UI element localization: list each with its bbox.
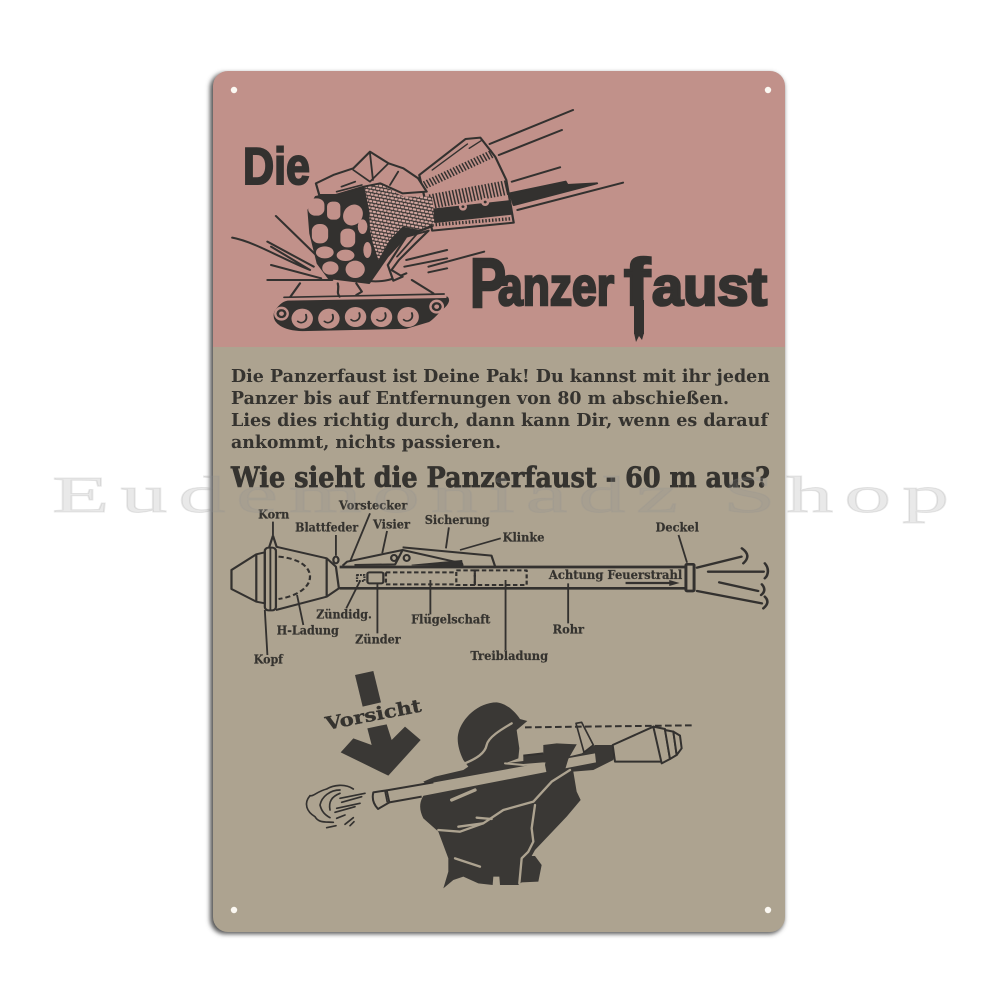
part labels: Kopf <box>254 652 284 666</box>
part labels: Visier <box>372 517 410 531</box>
caution arrow <box>341 671 421 776</box>
fist <box>308 152 434 283</box>
sign panels <box>213 71 785 932</box>
title: Panzerfaust: P <box>470 244 506 322</box>
part labels: Rohr <box>553 622 585 636</box>
part labels: Vorstecker <box>338 498 408 513</box>
part labels: Flügelschaft <box>411 612 491 626</box>
sleeve cone <box>419 138 514 231</box>
part labels: Treibladung <box>470 649 548 663</box>
launch tube on shoulder <box>373 744 596 809</box>
tank <box>274 280 449 331</box>
diagram: Panzerfaust cross-section <box>231 498 768 666</box>
title: Panzerfaust: anzer <box>498 257 614 317</box>
intro text block: Die Panzerfaust ist Deine Pak! Du kannst mit ihr jeden <box>231 366 770 387</box>
intro text block: Panzer bis auf Entfernungen von 80 m abschießen. <box>231 388 729 409</box>
warhead <box>613 727 682 763</box>
title: Die: Die <box>243 138 310 196</box>
mounting holes <box>231 87 771 913</box>
part labels: Achtung Feuerstrahl <box>548 568 683 582</box>
back blast <box>306 785 365 828</box>
title: Panzerfaust: f <box>624 245 651 319</box>
part labels: H-Ladung <box>277 623 339 637</box>
explosion lines <box>232 216 484 281</box>
warhead <box>231 536 339 610</box>
intro text block: ankommt, nichts passieren. <box>231 432 501 453</box>
title: Panzerfaust <box>470 244 767 342</box>
watermark: Eudemoniadz Shop <box>52 467 960 524</box>
intro text block: Lies dies richtig durch, dann kann Dir, wenn es darauf <box>231 410 769 431</box>
part labels: Deckel <box>656 520 699 535</box>
exhaust flames <box>697 548 768 608</box>
line of sight <box>525 725 693 727</box>
fire direction arrow <box>626 580 680 586</box>
caution label: Vorsicht <box>322 696 424 735</box>
sign shadow <box>210 73 784 934</box>
part labels: Zündidg. <box>316 607 372 621</box>
part labels: Korn <box>258 507 289 521</box>
intro text block <box>231 366 770 453</box>
part labels <box>254 498 699 666</box>
part labels: Sicherung <box>425 513 490 527</box>
soldier silhouette <box>420 702 615 888</box>
internal charge and fuze <box>357 570 527 585</box>
illustration: fist striking tank <box>232 110 623 331</box>
part labels: Zünder <box>355 632 401 646</box>
sight and trigger <box>333 547 495 567</box>
illustration: soldier firing and caution arrow <box>306 671 693 888</box>
panel: khaki body <box>213 347 785 932</box>
part labels: Blattfeder <box>295 520 359 535</box>
rear sight <box>576 722 593 752</box>
metal sign infographic <box>54 70 946 938</box>
soldier highlights <box>438 723 570 883</box>
heading: Wie sieht die Panzerfaust - 60 m aus? <box>230 461 770 494</box>
panel: pink header <box>213 71 785 348</box>
launch tube <box>340 564 694 591</box>
title: Panzerfaust: aust <box>652 257 767 317</box>
speed lines <box>490 110 623 210</box>
leader lines <box>265 513 687 655</box>
part labels: Klinke <box>503 530 545 545</box>
